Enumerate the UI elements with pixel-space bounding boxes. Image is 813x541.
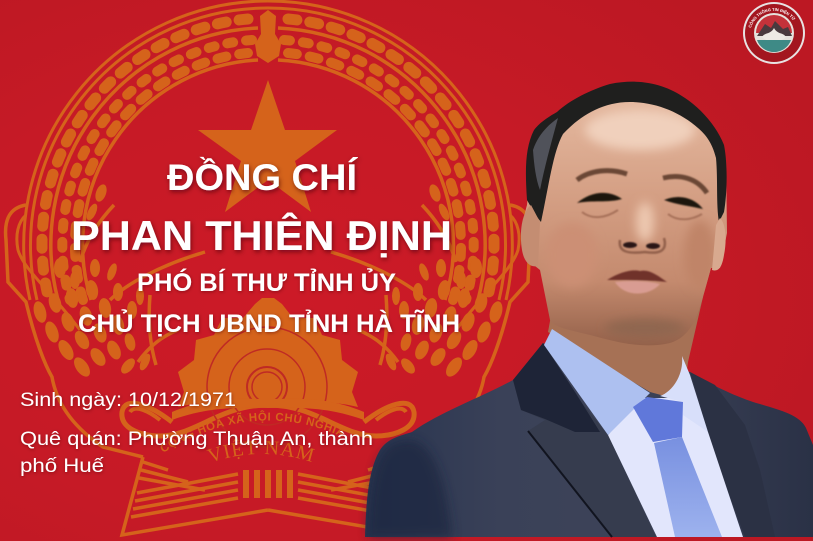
logo outer ring (743, 2, 805, 64)
left ear (521, 205, 540, 266)
logo sky (756, 15, 792, 33)
portrait (365, 82, 813, 537)
lapel notch line (528, 431, 612, 537)
facial features (577, 171, 707, 294)
eyes (577, 193, 622, 203)
neck (548, 297, 703, 398)
logo mountains (757, 21, 792, 36)
suit (365, 343, 813, 537)
subtitle: position 2: CHỦ TỊCH UBND TỈNH HÀ TĨNH (78, 308, 460, 338)
title: Đồng chí: ĐỒNG CHÍ (167, 156, 359, 198)
emblem center bars (243, 470, 293, 498)
tie knot (633, 397, 683, 442)
emblem right half (268, 1, 530, 535)
eyebrows (577, 171, 627, 180)
hometown: Quê quán: Phường Thuận An, thành (20, 429, 373, 450)
emblem top knot (255, 10, 281, 63)
national emblem watermark (4, 0, 530, 538)
suit shading (368, 440, 452, 537)
emblem motto: CỘNG HÒA XÃ HỘI CHỦ NGHĨA (160, 410, 343, 452)
left lapel (513, 343, 656, 537)
lapel shadow (513, 343, 600, 432)
emblem country name: VIỆT NAM (206, 439, 315, 462)
logo caption: CỔNG THÔNG TIN ĐIỆN TỬ (748, 8, 796, 28)
shirt body (608, 398, 743, 537)
emblem star (198, 80, 337, 212)
site logo (743, 2, 805, 64)
nose (620, 238, 665, 253)
logo water (757, 40, 791, 52)
logo inner disc (754, 13, 794, 53)
logo lotus (762, 28, 786, 42)
eye bags (582, 210, 618, 217)
shirt right collar (660, 356, 708, 432)
subtitle: position 1: PHÓ BÍ THƯ TỈNH ỦY (137, 267, 396, 297)
emblem gear (178, 298, 358, 447)
hair (526, 82, 727, 222)
face shading (582, 107, 714, 335)
title: name: PHAN THIÊN ĐỊNH (71, 211, 452, 259)
hometown: phố Huế (20, 456, 104, 477)
emblem left half (6, 1, 268, 535)
emblem ribbon band (172, 399, 364, 420)
right lapel (690, 372, 775, 537)
tie blade (654, 437, 722, 537)
right ear (712, 218, 726, 270)
hair highlight (533, 118, 558, 190)
birth date: Sinh ngày: 10/12/1971 (20, 390, 236, 411)
hometown (20, 429, 373, 477)
shirt left collar (544, 329, 650, 435)
head (524, 90, 727, 345)
mouth (607, 270, 667, 282)
